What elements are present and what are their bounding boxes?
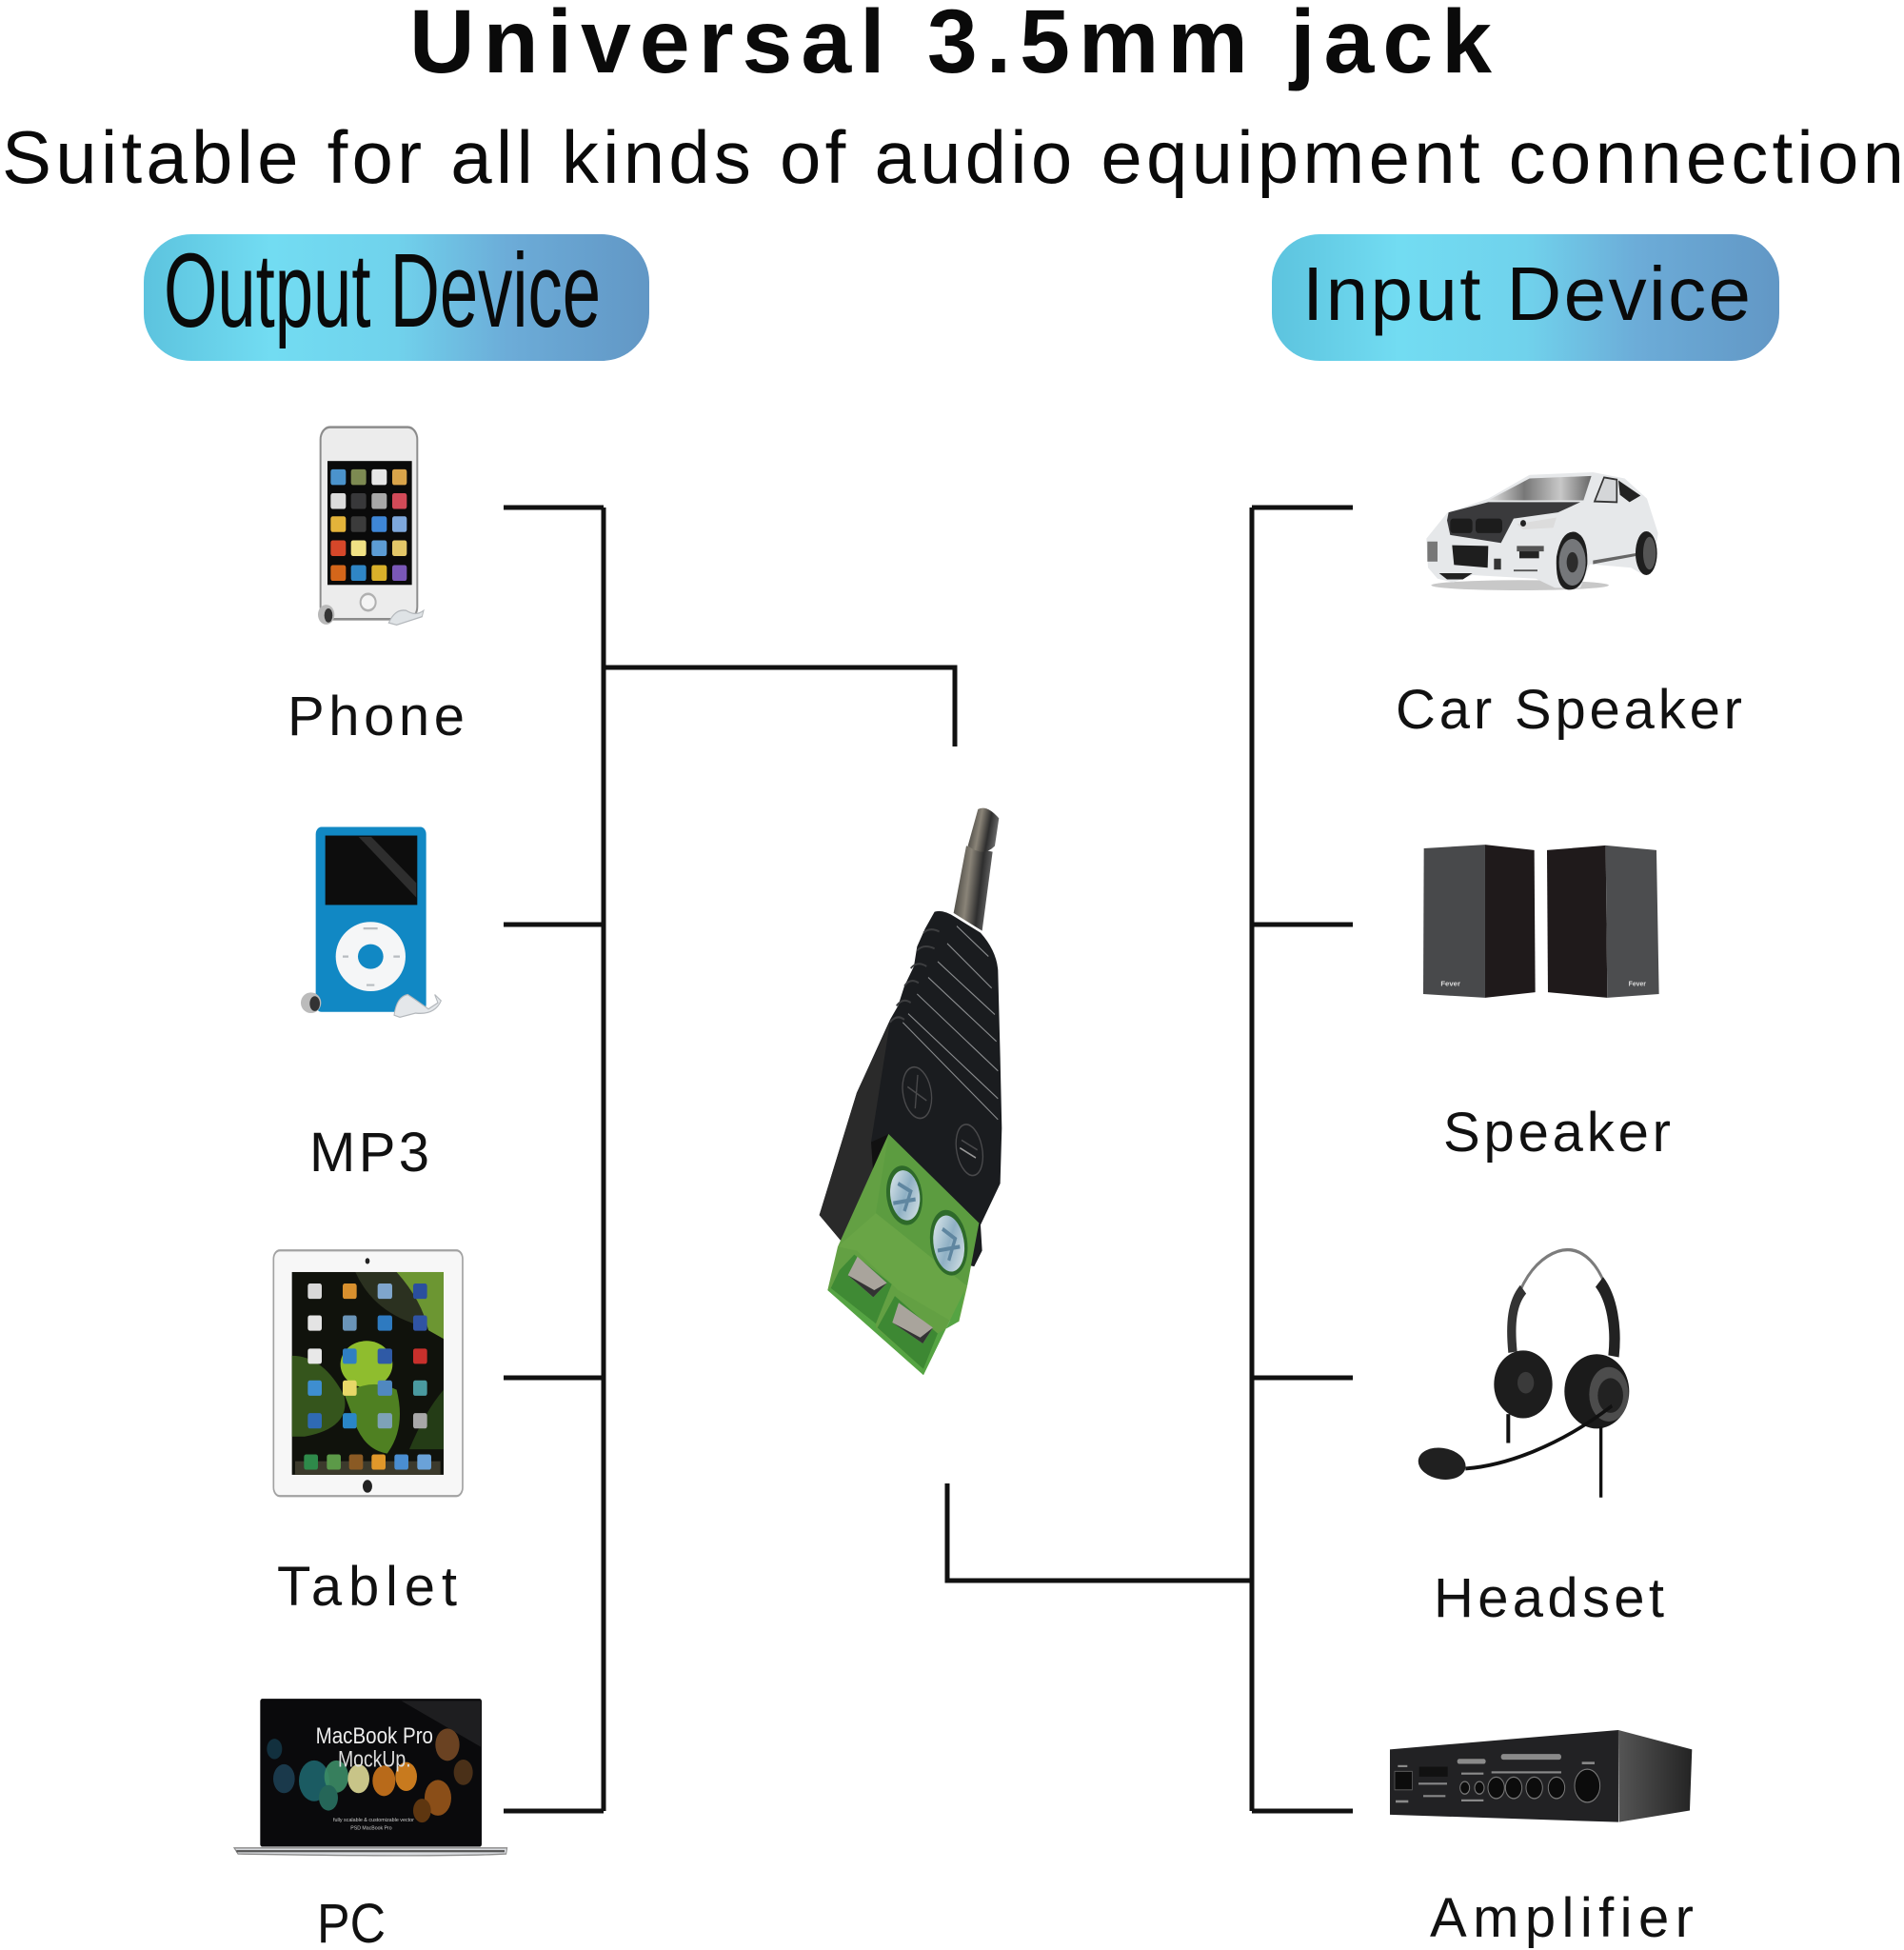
- connector lines: output side: [504, 507, 955, 1811]
- icon: laptop: [234, 1699, 507, 1856]
- label: tablet: Tablet: [277, 1556, 457, 1618]
- connector lines: input side: [947, 507, 1353, 1811]
- icon: laptop: MockUp.: [338, 1746, 411, 1772]
- label: speaker: Speaker: [1443, 1102, 1671, 1164]
- icon: amplifier: [1390, 1730, 1692, 1822]
- icon: phone: [318, 428, 424, 625]
- label: mp3: MP3: [309, 1122, 429, 1184]
- label: amplifier: Amplifier: [1430, 1887, 1694, 1949]
- icon: mp3 player: [301, 826, 441, 1017]
- center: 3.5mm jack connector: [820, 808, 1002, 1375]
- icon: laptop: MacBook Pro: [316, 1723, 433, 1749]
- icon: laptop: fully scalable & customizable vector: [333, 1818, 414, 1823]
- panel: output device heading: [144, 232, 649, 361]
- label: headset: Headset: [1434, 1567, 1664, 1629]
- jack pin: [954, 808, 999, 931]
- icon: car: [1426, 472, 1658, 590]
- icon: speakers: Fever: [1440, 980, 1460, 988]
- label: phone: Phone: [288, 686, 465, 747]
- jack body: [820, 911, 1002, 1266]
- panel: input device heading: [1272, 234, 1779, 361]
- icon: headset: [1417, 1250, 1629, 1498]
- label: car speaker: Car Speaker: [1396, 679, 1742, 741]
- terminal block: [827, 1134, 979, 1375]
- panel: input device heading: Input Device: [1302, 251, 1751, 336]
- subtitle: Suitable for all kinds of audio equipment connection: [2, 115, 1904, 199]
- panel: output device heading: Output Device: [164, 232, 601, 349]
- icon: tablet: [273, 1250, 463, 1496]
- icon: speakers: [1423, 845, 1659, 998]
- icon: speakers: Fever: [1629, 980, 1646, 988]
- icon: laptop: PSD MacBook Pro: [350, 1825, 392, 1832]
